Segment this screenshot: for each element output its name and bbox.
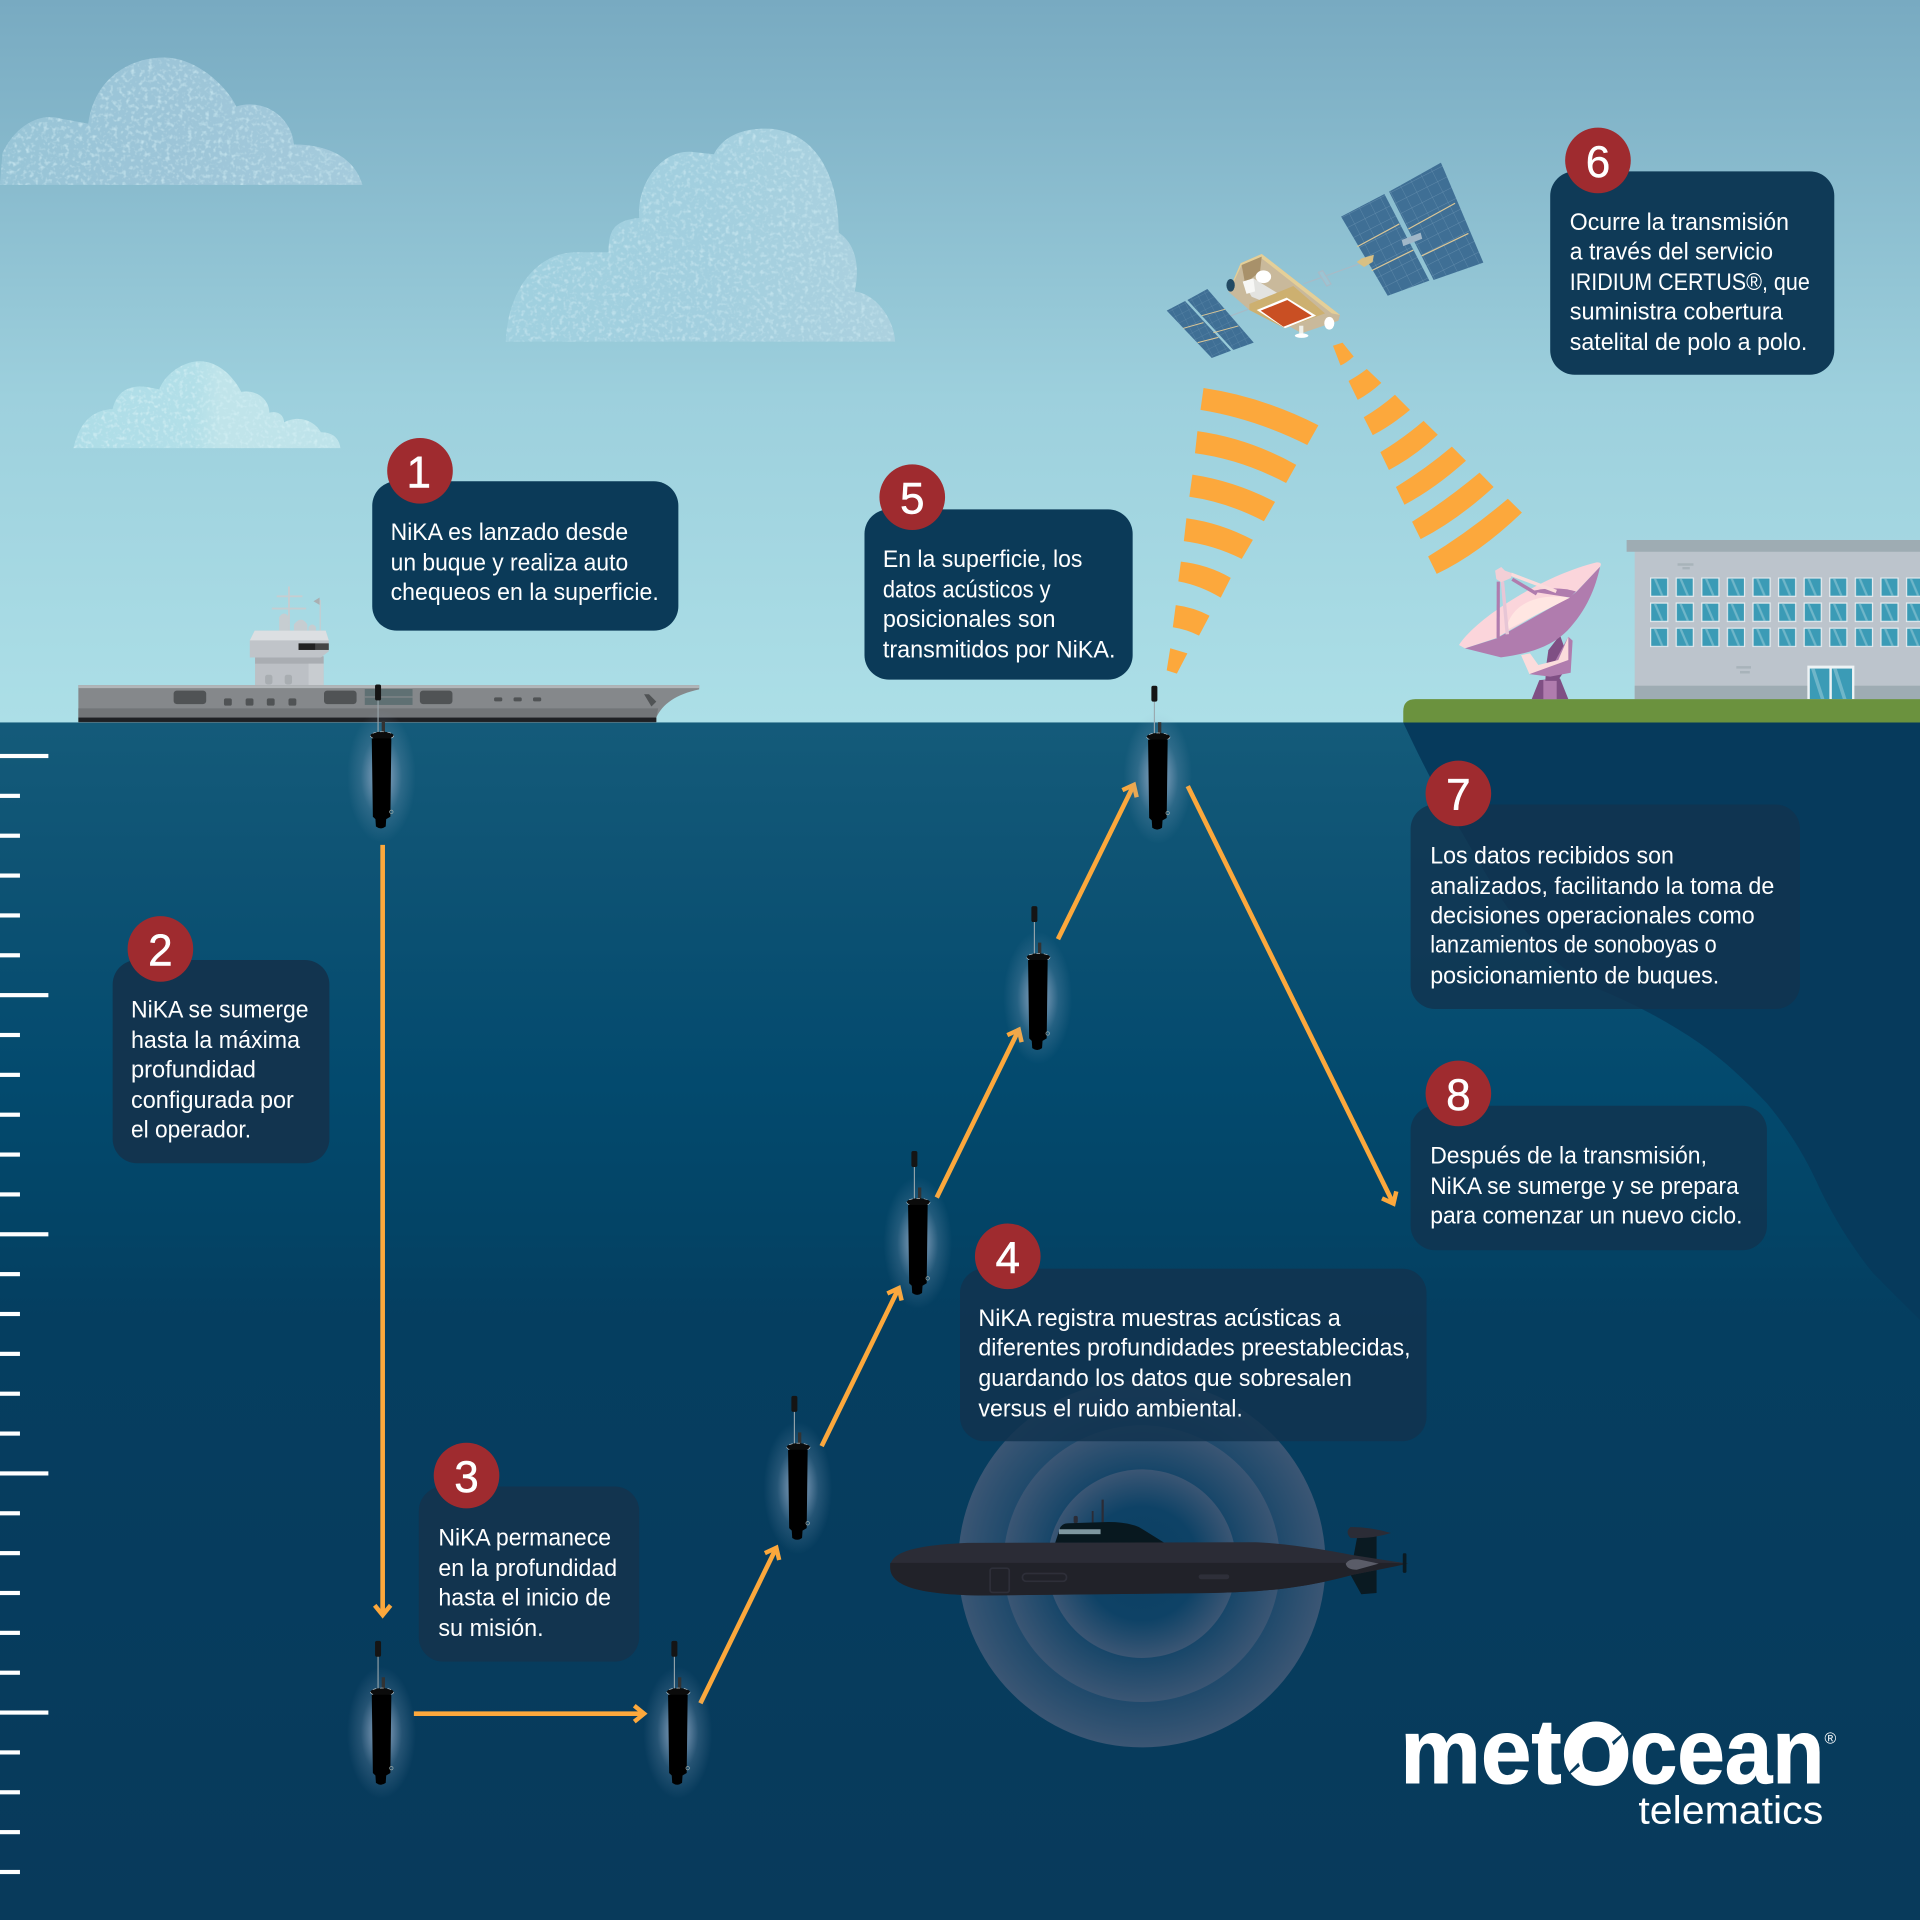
panel: step 6: a través del servicio xyxy=(1570,239,1773,266)
panel: step 8: Después de la transmisión, xyxy=(1430,1142,1707,1169)
arrow: ascent 2 xyxy=(822,1288,899,1446)
panel: step 2: el operador. xyxy=(131,1117,251,1144)
signal bands: buoy to satellite xyxy=(1167,388,1318,674)
panel: step 3: hasta el inicio de xyxy=(438,1584,611,1611)
logo: metOcean telematics: cean xyxy=(1630,1701,1824,1803)
panel: step 4 xyxy=(960,1224,1427,1441)
buoy: transmitting at surface xyxy=(1123,686,1192,844)
panel: step 7: decisiones operacionales como xyxy=(1430,902,1755,929)
cloud: centre xyxy=(506,129,895,342)
panel: step 7: posicionamiento de buques. xyxy=(1430,962,1719,989)
panel: step 2: configurada por xyxy=(131,1087,294,1114)
panel: step 3: en la profundidad xyxy=(438,1555,617,1582)
panel: step 7: lanzamientos de sonoboyas o xyxy=(1430,932,1717,959)
panel: step 4: 4 xyxy=(995,1234,1020,1283)
arrow: drift at depth xyxy=(414,1712,644,1716)
buoy: launch at surface xyxy=(347,684,416,842)
continental shelf xyxy=(1403,722,1920,1320)
panel: step 1: 1 xyxy=(407,448,431,497)
panel: step 6: 6 xyxy=(1586,138,1610,187)
arrow: ascent 1 xyxy=(700,1548,776,1703)
panel: step 5: transmitidos por NiKA. xyxy=(883,637,1116,664)
panel: step 4: versus el ruido ambiental. xyxy=(978,1396,1243,1423)
sea xyxy=(0,722,1920,1920)
buoy: ascent sample 3 xyxy=(1003,906,1072,1064)
panel: step 6 xyxy=(1550,128,1834,375)
icon: submarine xyxy=(890,1500,1408,1596)
panel: step 7: 7 xyxy=(1446,771,1471,820)
panel: step 8: 8 xyxy=(1446,1071,1471,1120)
panel: step 3: 3 xyxy=(454,1453,479,1502)
panel: step 8 xyxy=(1411,1061,1767,1250)
panel: step 5 xyxy=(864,464,1133,680)
panel: step 6: suministra cobertura xyxy=(1570,299,1784,326)
panel: step 1: un buque y realiza auto xyxy=(391,550,628,577)
panel: step 4: guardando los datos que sobresalen xyxy=(978,1365,1352,1392)
panel: step 1 xyxy=(372,438,678,631)
depth scale xyxy=(0,754,48,1874)
icon: ship xyxy=(78,587,699,722)
sky background xyxy=(0,0,1920,724)
panel: step 3: NiKA permanece xyxy=(438,1524,611,1551)
cloud: upper left xyxy=(0,58,362,185)
panel: step 4: diferentes profundidades preestablecidas, xyxy=(978,1335,1411,1362)
panel: step 4: NiKA registra muestras acústicas a xyxy=(978,1305,1342,1332)
arrow: ascent 4 xyxy=(1058,785,1134,939)
land xyxy=(1403,699,1920,722)
buoy: mission start xyxy=(643,1641,712,1799)
logo: metOcean telematics: ® xyxy=(1824,1731,1836,1748)
logo: metOcean telematics: O xyxy=(1570,1711,1622,1799)
panel: step 8: para comenzar un nuevo ciclo. xyxy=(1430,1202,1742,1229)
panel: step 1: chequeos en la superficie. xyxy=(391,579,659,606)
panel: step 7 xyxy=(1411,761,1800,1009)
panel: step 6: IRIDIUM CERTUS®, que xyxy=(1570,269,1810,296)
buoy: ascent sample 2 xyxy=(883,1151,952,1309)
sonar rings xyxy=(958,1380,1326,1747)
icon: ground station building xyxy=(1627,540,1920,699)
signal bands: satellite to ground station xyxy=(1333,343,1522,574)
panel: step 3: su misión. xyxy=(438,1615,544,1642)
panel: step 2: 2 xyxy=(148,927,173,976)
panel: step 5: 5 xyxy=(900,475,925,524)
arrow: descent to maximum depth xyxy=(381,845,385,1615)
logo: metOcean telematics: telematics xyxy=(1638,1789,1823,1832)
panel: step 2: profundidad xyxy=(131,1057,256,1084)
panel: step 7: Los datos recibidos son xyxy=(1430,842,1674,869)
panel: step 2: hasta la máxima xyxy=(131,1027,301,1054)
panel: step 2 xyxy=(113,916,329,1163)
cloud: lower left xyxy=(73,361,340,448)
icon: satellite xyxy=(1167,163,1483,358)
panel: step 7: analizados, facilitando la toma de xyxy=(1430,873,1774,900)
panel: step 2: NiKA se sumerge xyxy=(131,997,309,1024)
panel: step 8: NiKA se sumerge y se prepara xyxy=(1430,1173,1739,1200)
panel: step 5: posicionales son xyxy=(883,606,1056,633)
panel: step 5: En la superficie, los xyxy=(883,546,1083,573)
panel: step 6: Ocurre la transmisión xyxy=(1570,209,1789,236)
buoy: at maximum depth xyxy=(347,1641,416,1799)
panel: step 3 xyxy=(419,1443,639,1662)
logo: metOcean telematics: met xyxy=(1400,1701,1562,1803)
panel: step 1: NiKA es lanzado desde xyxy=(391,519,628,546)
buoy: ascent sample 1 xyxy=(763,1396,832,1554)
arrow: descent for new cycle xyxy=(1188,786,1393,1204)
icon: satellite dish xyxy=(1459,562,1601,699)
logo: metOcean telematics xyxy=(1400,1701,1836,1832)
panel: step 5: datos acústicos y xyxy=(883,577,1051,604)
arrow: ascent 3 xyxy=(937,1030,1019,1198)
panel: step 6: satelital de polo a polo. xyxy=(1570,329,1807,356)
